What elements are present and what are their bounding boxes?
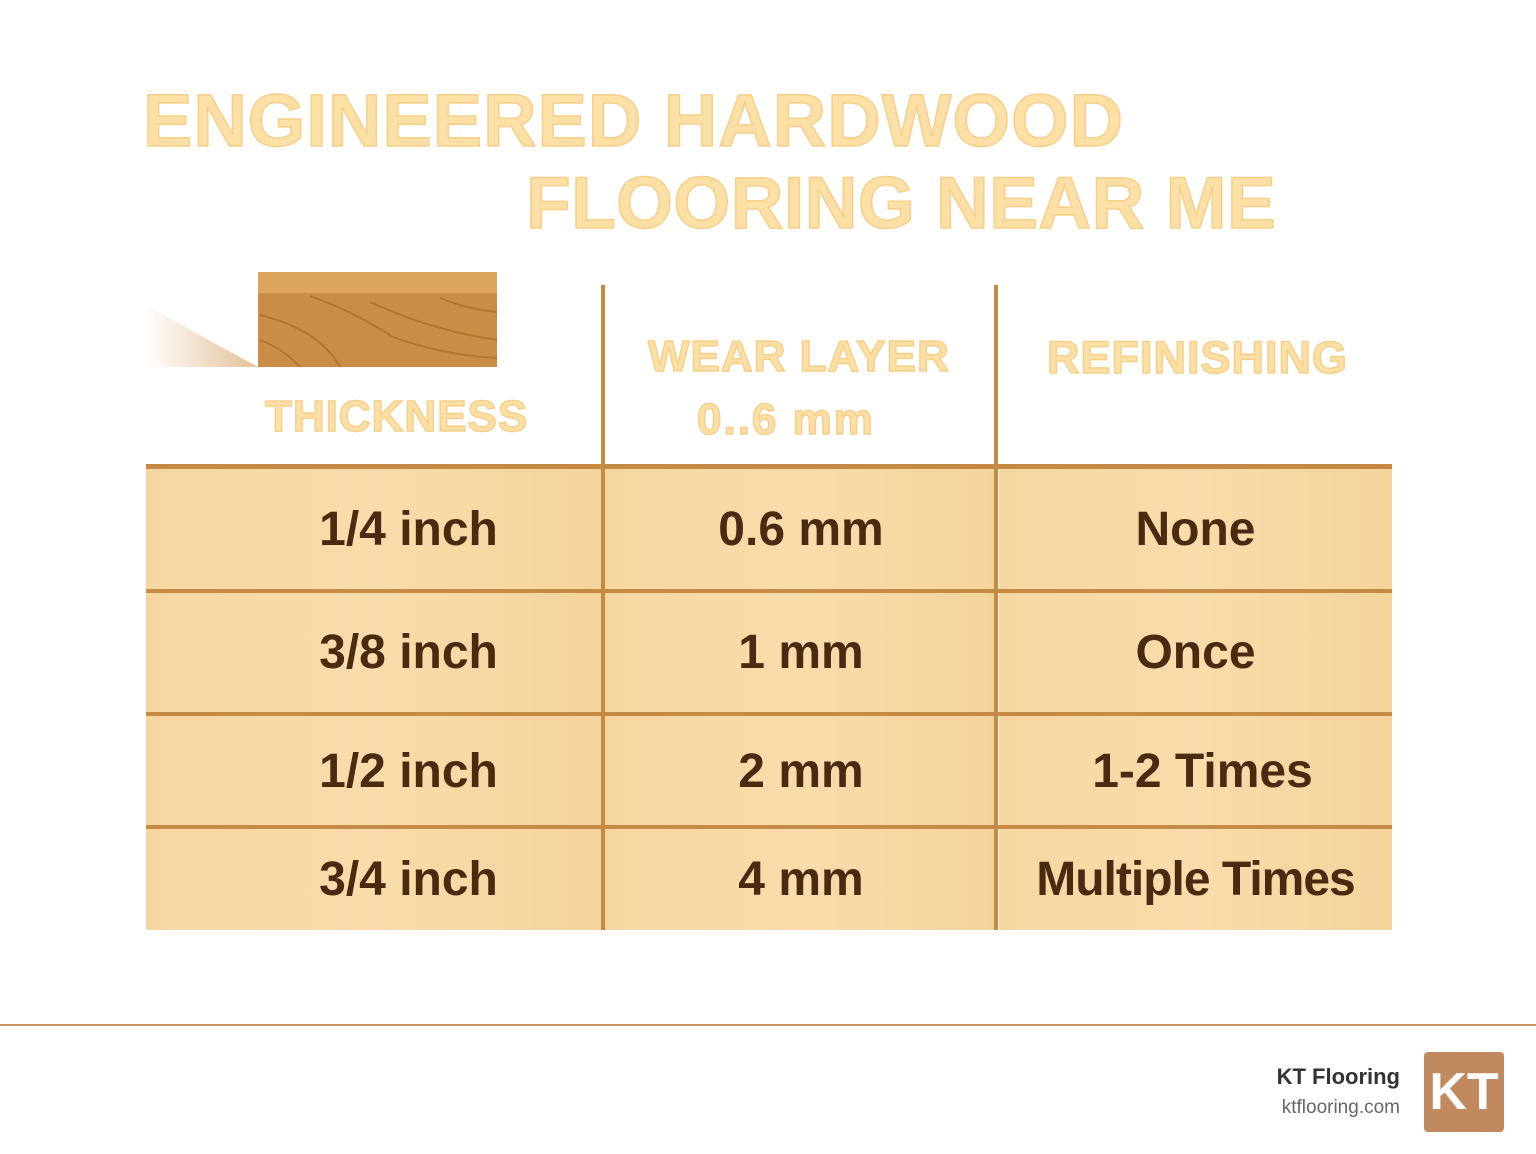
- text: 4 mm: [738, 853, 864, 906]
- text: 3/8 inch: [319, 626, 498, 679]
- text: Multiple Times: [1036, 853, 1355, 906]
- text: 1 mm: [738, 626, 864, 679]
- header: refinishing: REFINISHING: [1047, 332, 1348, 383]
- title: ENGINEERED HARDWOOD: [143, 79, 1124, 162]
- text: 1/2 inch: [319, 744, 498, 798]
- header: thickness: THICKNESS: [265, 392, 528, 441]
- text: 0.6 mm: [718, 502, 884, 556]
- text: None: [1136, 502, 1256, 556]
- title: FLOORING NEAR ME: [526, 163, 1276, 244]
- text: Once: [1135, 626, 1256, 679]
- footer: brand text: ktflooring.com: [1282, 1097, 1400, 1118]
- header: wear layer: 0..6 mm: [697, 395, 875, 444]
- text: 1-2 Times: [1092, 744, 1313, 798]
- header: wear layer: [647, 332, 950, 444]
- text: 2 mm: [738, 744, 864, 798]
- title: [143, 79, 1276, 244]
- logo: KT: [1424, 1052, 1504, 1132]
- header: wear layer: WEAR LAYER: [648, 332, 950, 381]
- logo: KT: KT: [1429, 1063, 1499, 1121]
- footer line: [0, 1024, 1536, 1026]
- footer: brand text: [1277, 1064, 1400, 1118]
- text: 1/4 inch: [319, 502, 498, 556]
- table: [146, 285, 1392, 931]
- text: 3/4 inch: [319, 853, 498, 906]
- icon: wood plank: [154, 272, 498, 368]
- footer: brand text: KT Flooring: [1277, 1064, 1400, 1089]
